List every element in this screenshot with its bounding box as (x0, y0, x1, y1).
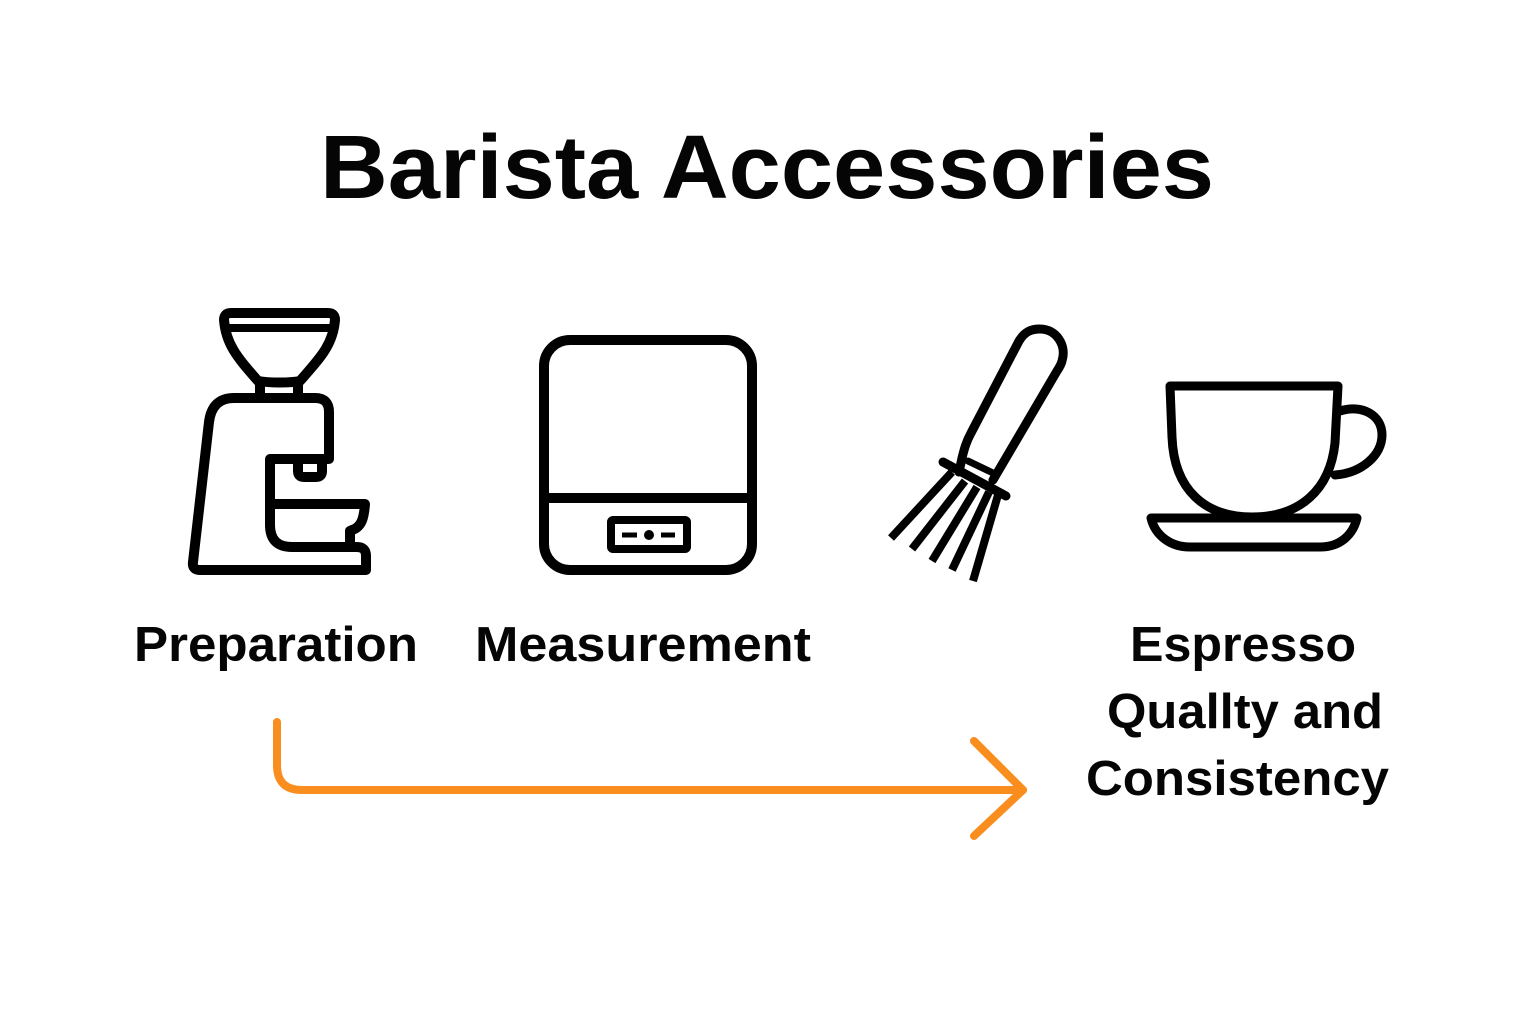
arrow: orange flow arrow (277, 722, 1023, 836)
icon: cleaning brush (891, 329, 1063, 581)
title: Barista Accessories (320, 118, 1214, 218)
label: Measurement: Measurement (475, 618, 811, 672)
label: Preparation: Preparation (134, 618, 418, 672)
label: Espresso Quality and Consistency: Espresso (1130, 618, 1356, 672)
scale display (611, 520, 687, 549)
label: Espresso Quality and Consistency: Quallty and (1107, 685, 1383, 739)
icon: coffee cup and saucer (1151, 386, 1382, 547)
icon: coffee grinder (193, 313, 366, 570)
icon: weighing scale (544, 340, 752, 570)
label: Espresso Quality and Consistency (1086, 618, 1389, 806)
label: Espresso Quality and Consistency: Consistency (1086, 752, 1389, 806)
